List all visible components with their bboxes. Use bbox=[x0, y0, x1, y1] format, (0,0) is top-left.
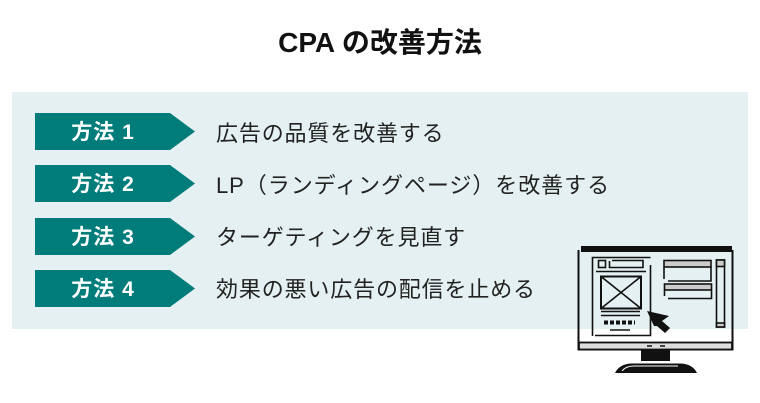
panel: background bbox=[12, 92, 748, 329]
tag: method 1 bbox=[35, 113, 195, 150]
tag: method 2 bbox=[35, 165, 195, 202]
title: CPA の改善方法 bbox=[278, 27, 482, 58]
tag: method 3: 方法 3 bbox=[71, 226, 135, 249]
icon: computer monitor with web page wireframe bbox=[578, 246, 734, 373]
tag: method 3 bbox=[35, 218, 195, 255]
tag: method 4 bbox=[35, 270, 195, 307]
text: method 1: 広告の品質を改善する bbox=[216, 121, 445, 146]
text: method 2: LP（ランディングページ）を改善する bbox=[216, 173, 610, 198]
tag: method 2: 方法 2 bbox=[71, 173, 135, 196]
text: method 3: ターゲティングを見直す bbox=[216, 225, 466, 250]
tag: method 1: 方法 1 bbox=[71, 121, 135, 144]
tag: method 4: 方法 4 bbox=[71, 278, 135, 301]
text: method 4: 効果の悪い広告の配信を止める bbox=[216, 277, 536, 302]
